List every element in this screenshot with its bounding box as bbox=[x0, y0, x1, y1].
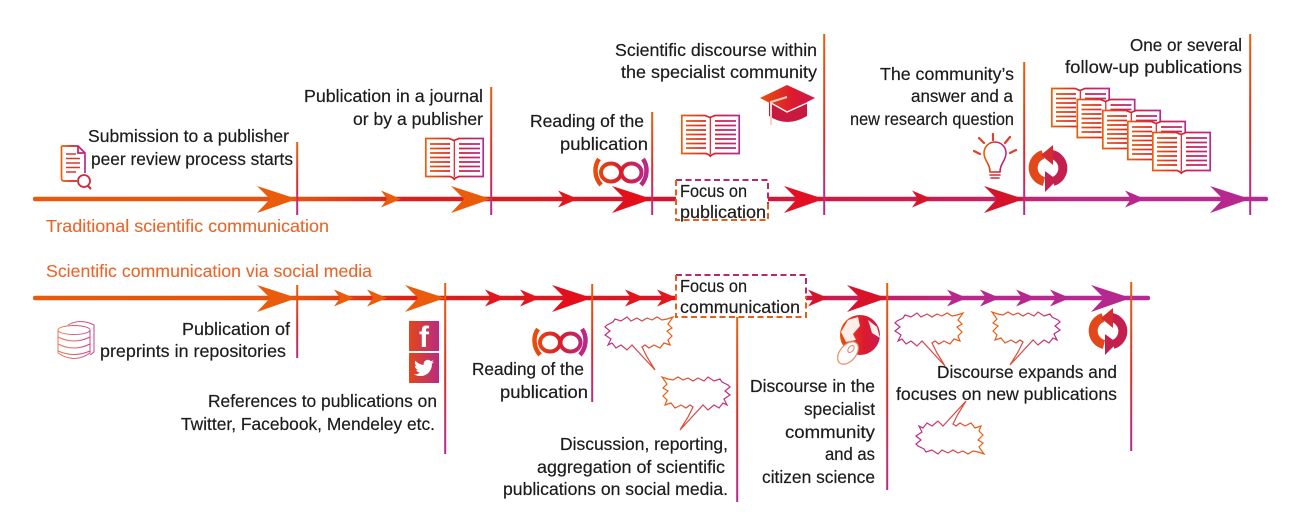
milestone lines: traditional bbox=[296, 34, 1251, 215]
icon: twitter bbox=[409, 353, 439, 383]
callout: focus on publication: Focus on bbox=[680, 181, 747, 201]
callout: focus on communication: communication bbox=[680, 297, 800, 317]
text: reading of the publication: Reading of the bbox=[530, 111, 644, 131]
text: submission: peer review process starts bbox=[91, 149, 293, 169]
text: community answer: The community’s bbox=[880, 64, 1014, 84]
icon: glasses bbox=[534, 329, 586, 355]
callout: focus on publication: publication bbox=[680, 202, 766, 222]
text: follow-up publications: One or several bbox=[1130, 35, 1242, 55]
icon: speech bubble 3 bbox=[895, 313, 963, 366]
text: reading of the publication bbox=[472, 359, 588, 402]
text: references: References to publications on bbox=[208, 391, 437, 411]
text: discourse expands: Discourse expands and bbox=[937, 362, 1117, 382]
text: reading of the publication bbox=[530, 111, 648, 154]
icon: database bbox=[58, 322, 94, 358]
arrowheads: traditional bbox=[257, 186, 1250, 213]
text: references: Twitter, Facebook, Mendeley etc. bbox=[181, 414, 435, 434]
text: preprints: Publication of bbox=[182, 319, 290, 339]
text: discussion bbox=[503, 434, 728, 499]
text: discussion: publications on social media. bbox=[503, 479, 728, 499]
text: references bbox=[181, 391, 437, 434]
text: discourse in the specialist community: specialist bbox=[804, 399, 875, 419]
icon: open book bbox=[682, 116, 739, 158]
icon: open book bbox=[426, 138, 483, 180]
icon: graduation cap bbox=[760, 85, 815, 125]
text: scientific discourse bbox=[615, 40, 817, 82]
text: discourse expands: focuses on new publications bbox=[896, 384, 1117, 404]
text: discourse in the specialist community bbox=[750, 376, 875, 487]
icon: light bulb bbox=[974, 134, 1016, 178]
text: follow-up publications bbox=[1065, 35, 1242, 77]
text: publication in a journal: Publication in a journal bbox=[304, 86, 483, 106]
timeline: social media bbox=[33, 282, 1150, 502]
text: community answer: new research question bbox=[850, 109, 1014, 129]
text: discourse in the specialist community: Discourse in the bbox=[750, 376, 875, 396]
callout: focus on communication bbox=[676, 275, 806, 317]
text: discourse in the specialist community: community bbox=[785, 422, 875, 442]
icon: refresh arrows bbox=[1093, 308, 1123, 355]
arrowheads: social media bbox=[257, 285, 1131, 312]
icon: glasses bbox=[595, 159, 647, 185]
text: submission bbox=[88, 126, 293, 169]
icon: speech bubble 2 bbox=[662, 377, 730, 430]
icon: refresh arrows bbox=[1033, 145, 1063, 192]
icon: stack of books bbox=[1052, 88, 1210, 174]
text: scientific discourse: Scientific discourse within bbox=[615, 40, 817, 60]
text: publication in a journal: or by a publisher bbox=[353, 109, 483, 129]
callout: focus on publication bbox=[676, 180, 768, 222]
icon: speech bubble 1 bbox=[605, 317, 673, 370]
text: discussion: Discussion, reporting, bbox=[560, 434, 728, 454]
heading: traditional scientific communication: Traditional scientific communication bbox=[46, 216, 329, 236]
text: reading of the publication: publication bbox=[500, 382, 588, 402]
text: reading of the publication: publication bbox=[560, 134, 648, 154]
text: follow-up publications: follow-up publications bbox=[1065, 57, 1242, 77]
text: preprints: preprints in repositories bbox=[100, 341, 286, 361]
text: discourse expands bbox=[896, 362, 1117, 404]
icon: document with magnifier bbox=[62, 146, 91, 189]
text: submission: Submission to a publisher bbox=[88, 126, 289, 146]
milestone lines: social media bbox=[296, 282, 1132, 502]
icon: speech bubble 5 bbox=[916, 401, 984, 454]
text: discourse in the specialist community: and as bbox=[825, 444, 875, 464]
icon: globe with mouse bbox=[834, 315, 880, 368]
text: reading of the publication: Reading of the bbox=[472, 359, 584, 379]
icon: facebook: f bbox=[419, 321, 430, 354]
text: publication in a journal bbox=[304, 86, 483, 129]
text: community answer bbox=[850, 64, 1014, 129]
text: scientific discourse: the specialist community bbox=[621, 62, 817, 82]
text: discourse in the specialist community: citizen science bbox=[762, 467, 875, 487]
text: community answer: answer and a bbox=[911, 86, 1013, 106]
text: preprints bbox=[100, 319, 290, 361]
heading: scientific communication via social media: Scientific communication via social media bbox=[46, 261, 372, 281]
icon: facebook bbox=[409, 321, 439, 354]
callout: focus on communication: Focus on bbox=[680, 276, 747, 296]
icon: speech bubble 4 bbox=[992, 312, 1060, 365]
timeline: traditional scientific communication bbox=[33, 34, 1268, 215]
text: discussion: aggregation of scientific bbox=[537, 457, 725, 477]
